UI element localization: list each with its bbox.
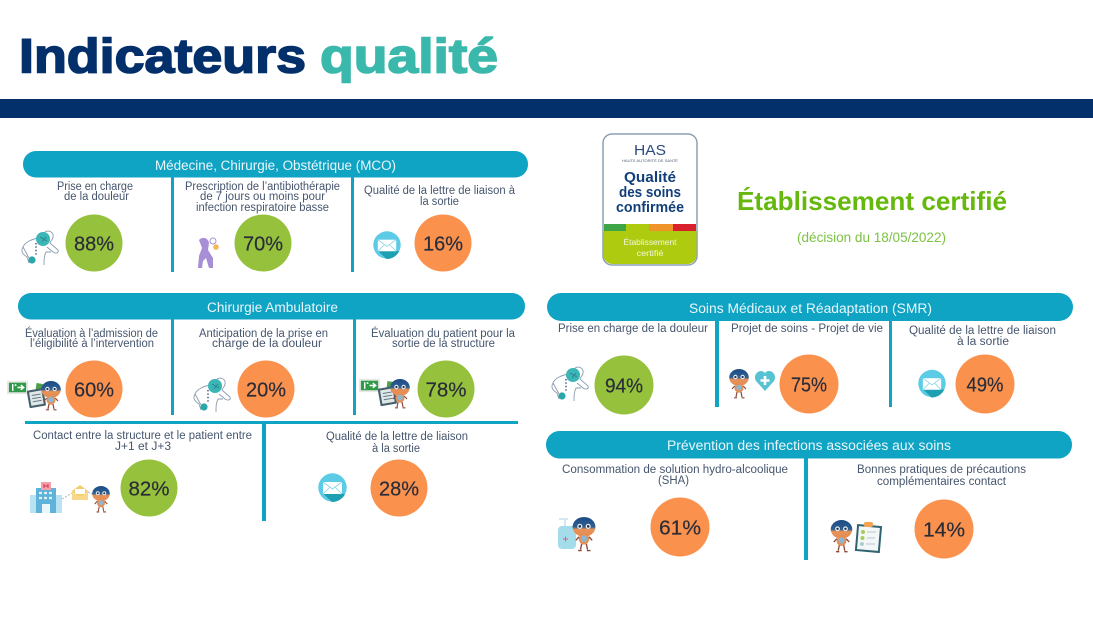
text: décision: (décision du 18/05/2022) — [797, 230, 946, 245]
heading: Prévention: Prévention des infections associées aux soins — [667, 438, 951, 453]
panel: MCO — [22, 151, 528, 272]
indicator: lettre de liaison MCO: Qualité de la lettre de liaison à — [364, 185, 516, 197]
indicator: antibiothérapie: infection respiratoire basse — [196, 202, 329, 214]
indicator: antibiothérapie: de 7 jours ou moins pour — [200, 191, 325, 203]
indicator: contact J+1 J+3: Contact entre la structure et le patient entre — [33, 430, 252, 442]
indicator: anticipation douleur: 20% — [246, 378, 286, 402]
indicator: lettre de liaison SMR: Qualité de la lettre de liaison — [909, 325, 1056, 337]
indicator: lettre de liaison ambulatoire: Qualité de la lettre de liaison — [326, 431, 468, 443]
indicator: antibiothérapie: 70% — [243, 232, 283, 256]
indicator: précautions contact: complémentaires contact — [877, 476, 1007, 488]
panel: Prévention — [546, 431, 1072, 560]
badge: HAS: HAUTE AUTORITÉ DE SANTÉ — [622, 158, 679, 163]
heading: établissement certifié: Établissement certifié — [737, 186, 1007, 216]
icon: hospital — [30, 482, 62, 513]
title: qualité — [320, 30, 498, 84]
badge: HAS: des soins — [619, 185, 681, 201]
indicator: précautions contact — [831, 464, 1026, 558]
title: Indicateurs — [19, 30, 306, 84]
indicator: SHA — [558, 464, 788, 556]
indicator: douleur MCO — [22, 181, 133, 272]
panel: Chirurgie Ambulatoire — [7, 293, 525, 521]
panel: SMR — [547, 293, 1073, 414]
icon: heart — [755, 371, 775, 391]
panel: certification — [603, 134, 1007, 265]
heading: Prévention — [546, 431, 1072, 458]
indicator: lettre de liaison SMR — [909, 325, 1056, 414]
header band — [0, 99, 1093, 118]
heading: SMR — [547, 293, 1073, 321]
indicator: antibiothérapie — [185, 181, 340, 272]
indicator: douleur MCO: 88% — [74, 232, 114, 256]
indicator: contact J+1 J+3: 82% — [128, 478, 170, 500]
heading: MCO — [23, 151, 528, 178]
indicator: anticipation douleur: Anticipation de la prise en — [199, 328, 328, 340]
indicator: anticipation douleur: charge de la douleur — [212, 338, 322, 350]
badge: HAS: HAS — [634, 142, 666, 159]
icon: bottle — [558, 519, 576, 549]
indicator: antibiothérapie: Prescription de l’antibiothérapie — [185, 181, 340, 193]
badge: HAS: Établissement — [624, 238, 677, 247]
indicator: projet de soins: 75% — [791, 374, 827, 396]
indicator: lettre de liaison SMR: 49% — [966, 374, 1004, 396]
indicator: éligibilité: Évaluation à l’admission de — [25, 327, 158, 340]
indicator: lettre de liaison ambulatoire — [318, 431, 468, 516]
title — [19, 30, 498, 84]
badge: HAS: Qualité — [624, 170, 676, 186]
indicator: SHA: (SHA) — [658, 475, 689, 487]
indicator: éligibilité: 60% — [74, 378, 114, 402]
indicator: lettre de liaison ambulatoire: à la sortie — [372, 443, 420, 455]
indicator: contact J+1 J+3 — [30, 430, 252, 516]
badge: HAS — [603, 134, 697, 265]
heading: Chirurgie Ambulatoire: Chirurgie Ambulatoire — [207, 300, 338, 315]
heading: Chirurgie Ambulatoire — [18, 293, 525, 320]
indicator: lettre de liaison MCO — [364, 185, 516, 272]
indicator: sortie de la structure: Évaluation du patient pour la — [371, 327, 516, 340]
indicator: anticipation douleur — [194, 328, 328, 418]
indicator: sortie de la structure: sortie de la structure — [392, 338, 495, 350]
indicator: SHA: Consommation de solution hydro-alcoolique — [562, 464, 788, 476]
indicator: douleur MCO: de la douleur — [64, 191, 129, 203]
indicator: projet de soins: Projet de soins - Projet de vie — [731, 323, 883, 335]
heading: MCO: Médecine, Chirurgie, Obstétrique (MCO) — [155, 158, 396, 173]
indicator: douleur SMR — [552, 323, 708, 414]
icon: envelope — [72, 485, 88, 500]
badge: HAS: confirmée — [616, 200, 684, 216]
indicator: lettre de liaison MCO: 16% — [423, 232, 463, 256]
indicator: éligibilité — [7, 327, 158, 418]
icon: clipboard — [855, 522, 882, 553]
indicator: douleur SMR: Prise en charge de la douleur — [558, 323, 708, 335]
heading: SMR: Soins Médicaux et Réadaptation (SMR) — [689, 301, 932, 316]
indicator: précautions contact: 14% — [923, 518, 965, 542]
indicator: douleur SMR: 94% — [605, 374, 643, 398]
icon: sick person — [198, 238, 219, 268]
indicator: lettre de liaison MCO: la sortie — [420, 196, 459, 208]
indicator: douleur MCO: Prise en charge — [57, 181, 133, 193]
indicator: SHA: 61% — [659, 516, 701, 540]
indicator: précautions contact: Bonnes pratiques de précautions — [857, 464, 1026, 476]
indicator: éligibilité: l’éligibilité à l’intervention — [30, 338, 154, 350]
badge: HAS: certifié — [636, 249, 664, 258]
indicator: lettre de liaison ambulatoire: 28% — [379, 478, 419, 500]
indicator: sortie de la structure — [359, 327, 516, 418]
indicator: projet de soins — [729, 323, 883, 414]
indicator: contact J+1 J+3: J+1 et J+3 — [115, 441, 171, 453]
indicator: lettre de liaison SMR: à la sortie — [957, 336, 1009, 348]
indicator: sortie de la structure: 78% — [426, 378, 466, 402]
